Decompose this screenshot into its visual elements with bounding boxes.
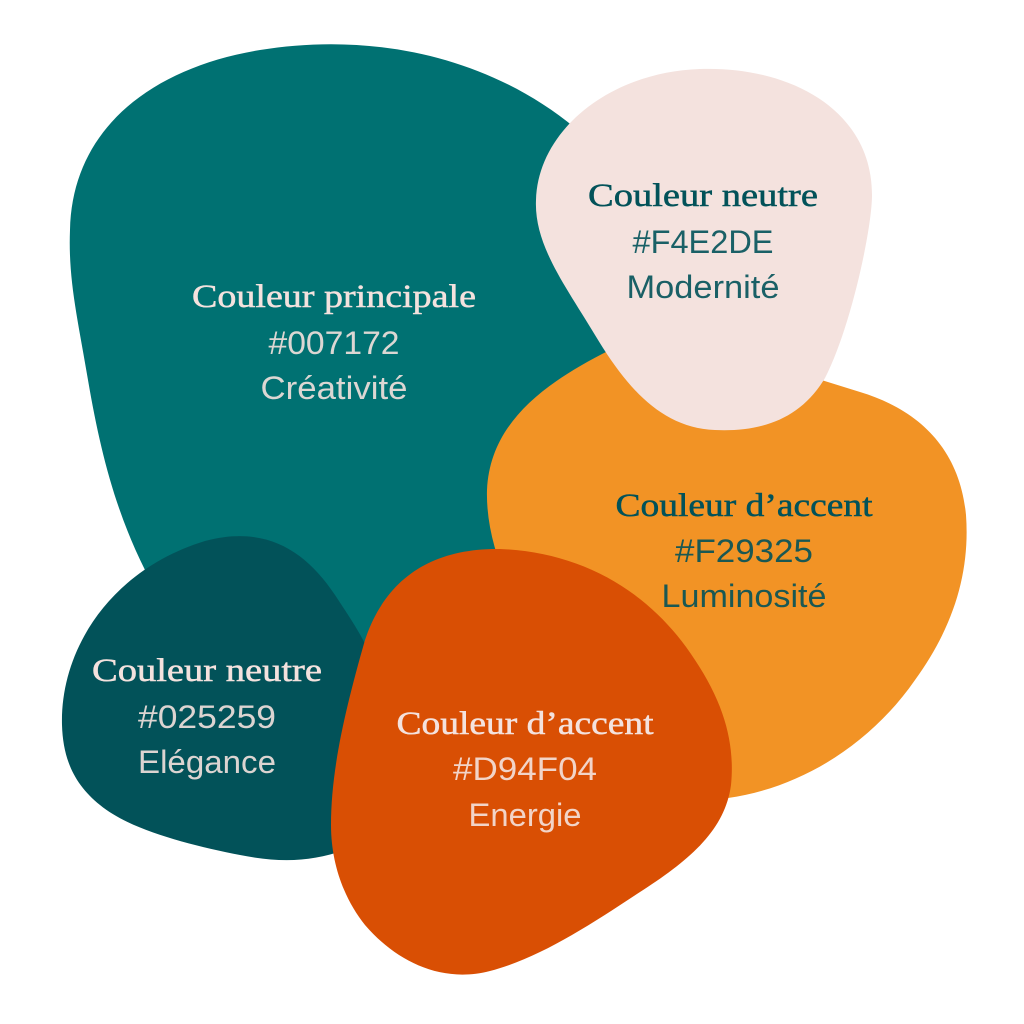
blob: couleur d'accent jaune xyxy=(487,350,967,798)
text: couleur d'accent jaune: Luminosité xyxy=(662,578,826,614)
text: couleur d'accent orange: Energie xyxy=(468,797,582,833)
text: couleur d'accent orange: #D94F04 xyxy=(453,751,597,787)
text: couleur d'accent jaune: #F29325 xyxy=(675,533,813,569)
text: couleur principale xyxy=(192,279,476,406)
text: couleur d'accent jaune: Couleur d’accent xyxy=(616,488,872,524)
text: couleur neutre claire xyxy=(588,178,818,305)
text: couleur neutre claire: Couleur neutre xyxy=(588,178,818,214)
text: couleur neutre claire: #F4E2DE xyxy=(632,224,774,260)
text: couleur principale: #007172 xyxy=(268,325,400,361)
blob: couleur d'accent orange xyxy=(331,549,732,975)
text: couleur neutre foncée: Elégance xyxy=(138,744,276,780)
blob: couleur neutre claire xyxy=(536,69,872,430)
text: couleur neutre foncée: #025259 xyxy=(138,699,276,735)
text: couleur neutre foncée: Couleur neutre xyxy=(92,653,322,689)
blob: couleur principale xyxy=(70,44,610,650)
text: couleur neutre claire: Modernité xyxy=(626,269,780,305)
text: couleur principale: Couleur principale xyxy=(192,279,476,315)
text: couleur d'accent orange xyxy=(396,706,654,833)
text: couleur principale: Créativité xyxy=(260,370,408,406)
blob: couleur neutre foncée xyxy=(62,536,370,860)
text: couleur d'accent orange: Couleur d’accent xyxy=(396,706,654,742)
text: couleur d'accent jaune xyxy=(616,488,872,614)
text: couleur neutre foncée xyxy=(92,653,322,780)
